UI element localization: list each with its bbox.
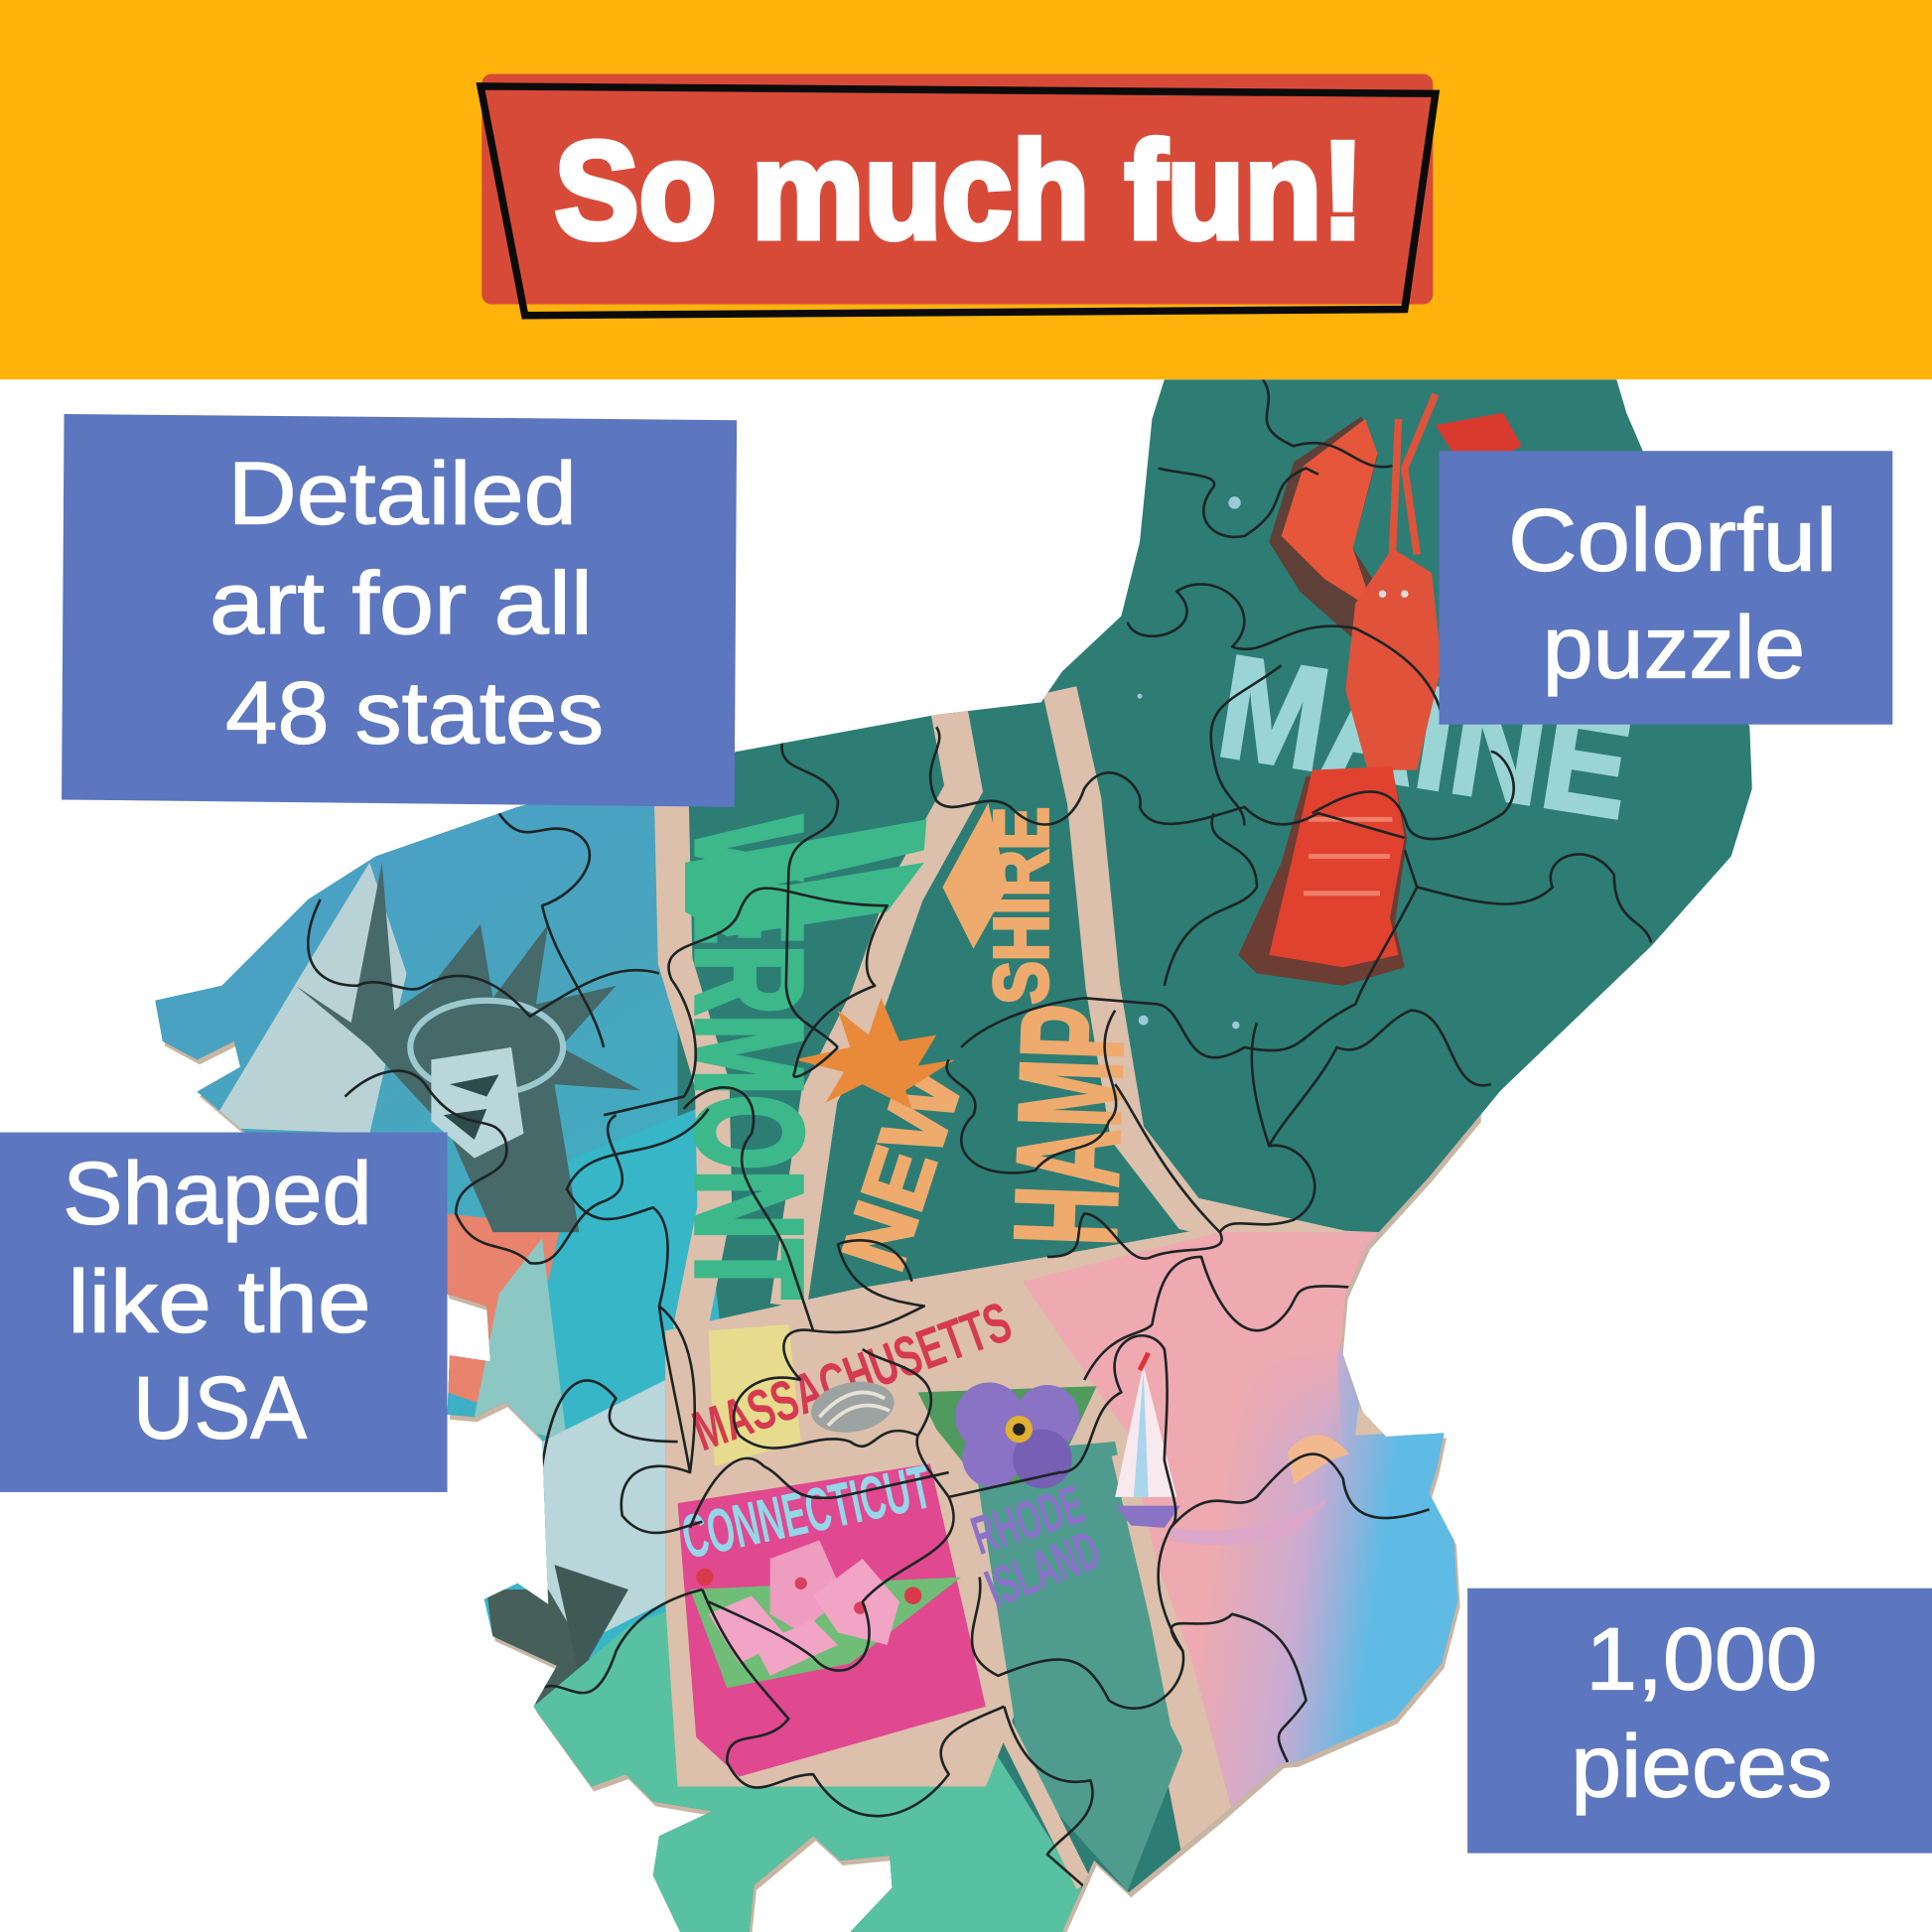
Maine label: MAINE [1208, 624, 1642, 850]
Statue lower robe [530, 1380, 665, 1651]
Rhode Island label: RHODE [965, 1473, 1091, 1567]
callout: Shaped like the USA: Shaped [63, 1143, 372, 1242]
callout: Detailed art for all 48 states: art for all [209, 553, 593, 652]
callout: Colorful puzzle: puzzle [1543, 598, 1805, 697]
Massachusetts pink fade [1023, 1232, 1380, 1453]
callout: Shaped like the USA [0, 1133, 448, 1492]
Connecticut label: CONNECTICUT [676, 1452, 937, 1573]
Connecticut panel [678, 1463, 986, 1777]
callout: 1,000 pieces [1467, 1588, 1932, 1854]
callout: Detailed art for all 48 states: Detailed [228, 443, 577, 542]
Statue robe [209, 863, 407, 1134]
Turquoise lower New York [542, 1109, 721, 1442]
Rhode Island label [970, 1485, 1098, 1607]
Maple leaf [794, 998, 955, 1109]
Yellow patch [709, 1324, 801, 1466]
callout: 1,000 pieces: 1,000 [1586, 1609, 1818, 1709]
Statue of Liberty head [296, 863, 640, 1232]
NH/Maine border strip [1059, 690, 1355, 1251]
New Hampshire label: HAMP [984, 1002, 1156, 1248]
puzzle photo: New England states [123, 369, 1849, 1932]
banner sketch outline [481, 86, 1436, 316]
title text: So much fun! [554, 114, 1364, 268]
New Hampshire label: NEW [823, 1056, 981, 1281]
Sea ripples and sun [1171, 1497, 1330, 1545]
Laurel flowers [690, 1540, 961, 1688]
orange peak [942, 803, 1008, 949]
Lobster [1238, 394, 1522, 986]
Clam shell [811, 1382, 895, 1433]
Vermont border strip [671, 801, 715, 1330]
Vermont label: VERMONT [664, 816, 832, 1299]
Green lower-left ground [533, 1601, 1109, 1932]
Massachusetts label: MASSACHUSETTS [685, 1290, 1020, 1463]
Vermont green bands [685, 819, 926, 936]
Sailboat [1115, 1353, 1180, 1528]
callout: Shaped like the USA: like the [68, 1252, 371, 1351]
callout: Colorful puzzle [1440, 451, 1892, 725]
callout: Detailed art for all 48 states [62, 414, 737, 807]
banner background [482, 73, 1433, 305]
callout: 1,000 pieces: pieces [1571, 1716, 1832, 1815]
Massachusetts pink and beige [665, 1226, 1478, 1861]
Maine specks [1138, 496, 1241, 1029]
New York sky [155, 804, 678, 1725]
title banner [481, 73, 1436, 316]
puzzle edge shadow [165, 1041, 1481, 1932]
header band [0, 0, 1932, 379]
New Hampshire label [841, 808, 1124, 1273]
Rhode Island panel [973, 1442, 1182, 1891]
New Hampshire label: SHIRE [979, 807, 1064, 1004]
Pansy [918, 1382, 1097, 1491]
callout: Shaped like the USA: USA [133, 1357, 307, 1456]
callout: Detailed art for all 48 states: 48 states [225, 662, 604, 761]
Maine and Vermont teal ground [123, 369, 1849, 1932]
Vermont/NH border strip [788, 709, 964, 1307]
Statue torch plinth [448, 1213, 561, 1417]
callout: Colorful puzzle: Colorful [1508, 490, 1837, 590]
Rhode Island label: ISLAND [977, 1519, 1109, 1619]
jigsaw cut lines [308, 379, 1651, 1897]
